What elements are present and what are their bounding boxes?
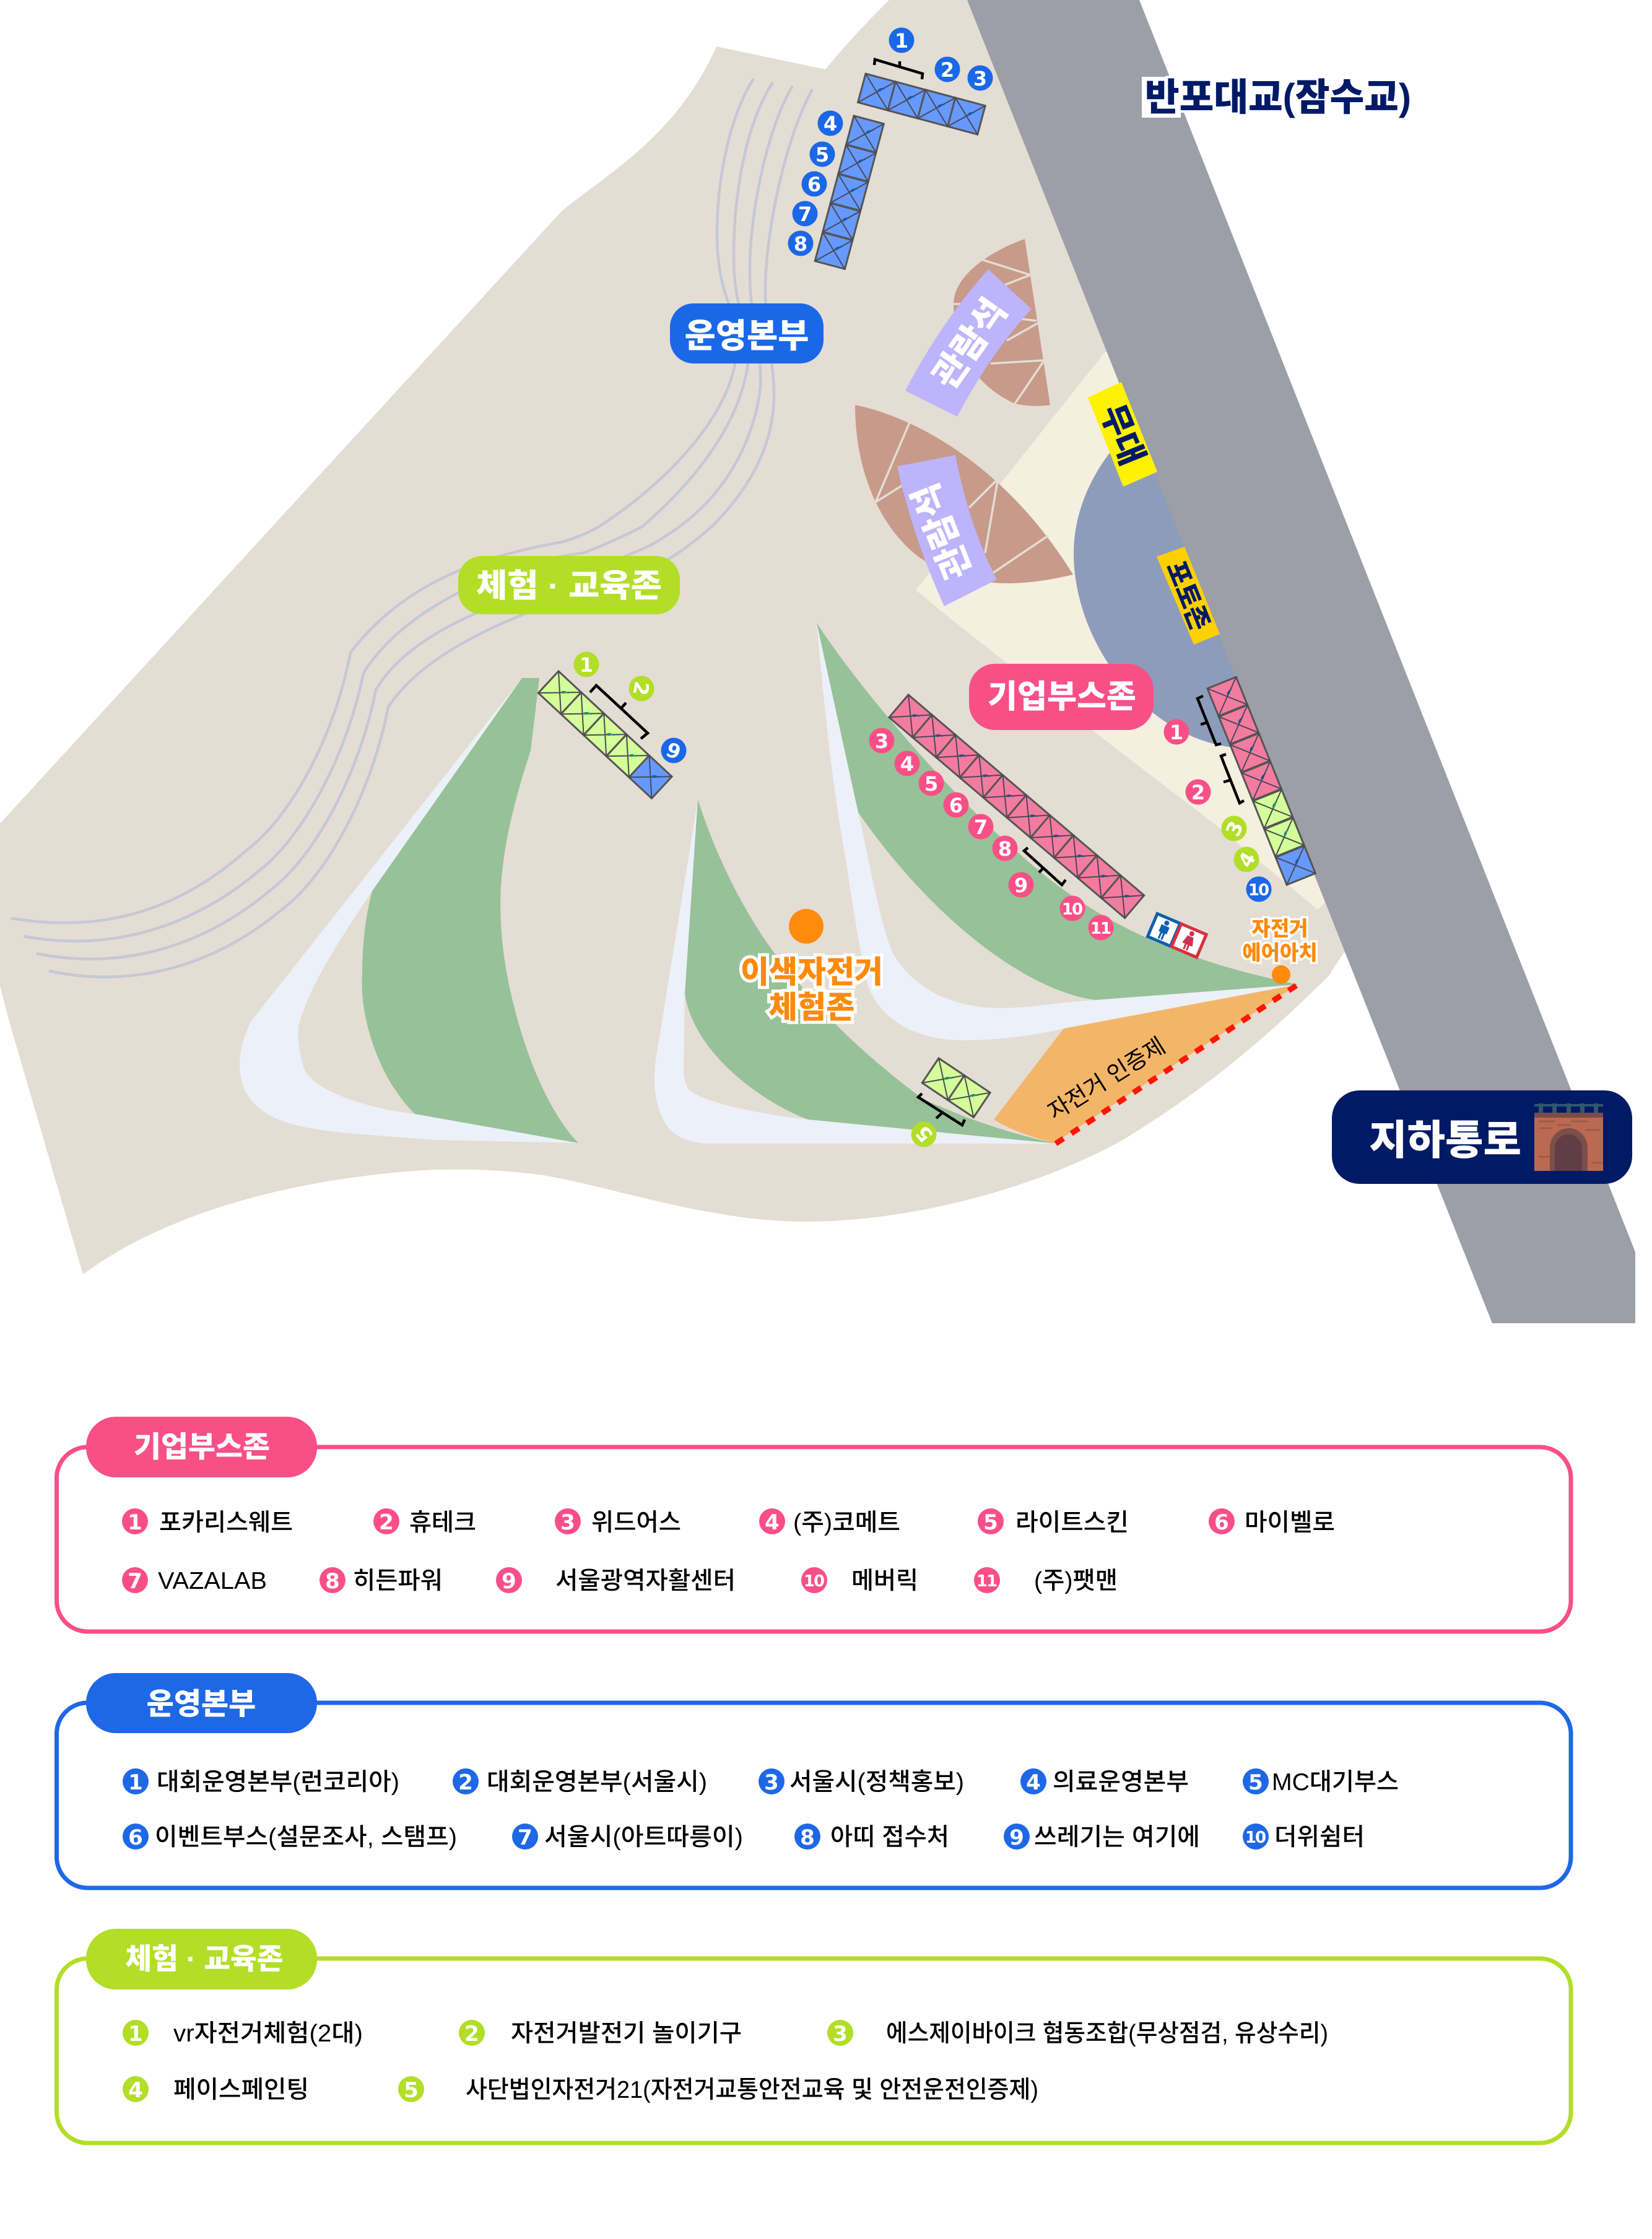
badges: education on map: 2 <box>628 680 654 697</box>
plaza <box>916 352 1362 910</box>
list: company booths: 7 <box>128 1569 142 1594</box>
list: company booths: 2 <box>379 1510 394 1535</box>
list: operations: 1 <box>128 1770 143 1795</box>
list: operations: MC대기부스 <box>1272 1769 1399 1796</box>
label: stage <box>1088 382 1157 487</box>
list: operations: 서울시(정책홍보) <box>789 1769 964 1796</box>
label: seating top: 관람석 <box>925 292 1015 396</box>
badges: company booths on map: 8 <box>998 837 1012 861</box>
list: operations <box>123 1768 1399 1851</box>
pill: company booths <box>969 664 1154 730</box>
badges: education on map: 5 <box>911 1121 937 1147</box>
bridge name: 반포대교(잠수교) <box>1145 76 1411 118</box>
path middle <box>654 799 1058 1144</box>
booths: green pair <box>922 1058 990 1118</box>
booths: pink row <box>889 695 1144 918</box>
badges: company booths on map: 10 <box>1062 900 1082 919</box>
badges: company booths on map <box>869 720 1211 940</box>
list: company booths: 라이트스킨 <box>1015 1510 1129 1536</box>
air arch marker <box>1242 917 1318 984</box>
air arch marker: 자전거 <box>1251 917 1308 940</box>
badges: operations on map: 1 <box>895 29 908 53</box>
badges: company booths on map: 2 <box>1191 781 1205 804</box>
list: education: 5 <box>404 2078 419 2103</box>
list: education: 2 <box>464 2022 479 2046</box>
list: education: 페이스페인팅 <box>173 2077 309 2103</box>
list: company booths: (주)팻맨 <box>1034 1568 1118 1594</box>
lawn middle <box>685 799 1058 1144</box>
list: company booths: 1 <box>128 1510 142 1535</box>
badges: company booths on map: 1 <box>1170 721 1183 744</box>
booths: top row <box>858 74 985 134</box>
list: company booths: 위드어스 <box>591 1510 681 1536</box>
badges: operations on map: 10 <box>1248 881 1269 900</box>
list: education: 자전거발전기 놀이기구 <box>511 2020 742 2047</box>
path left <box>240 678 578 1143</box>
list: operations: 7 <box>518 1825 533 1850</box>
list: company booths: 9 <box>502 1569 516 1594</box>
brackets <box>590 59 1244 1125</box>
map <box>0 0 1635 1323</box>
list: company booths: 5 <box>983 1510 998 1535</box>
icon: tunnel <box>1534 1103 1603 1171</box>
pill: education: 체험 · 교육존 <box>476 568 662 604</box>
label: photo zone: 포토존 <box>1161 557 1215 635</box>
badges: company booths on map: 9 <box>1014 874 1028 897</box>
bicycle certification area <box>994 985 1298 1143</box>
list: operations: 대회운영본부(런코리아) <box>157 1769 399 1796</box>
panel: education <box>57 1929 1571 2143</box>
badges: operations on map <box>661 27 1272 902</box>
badges: company booths on map: 11 <box>1090 920 1111 938</box>
list: operations: 9 <box>1009 1825 1024 1850</box>
contour lines <box>11 79 812 977</box>
list: operations: 4 <box>1026 1770 1041 1795</box>
badges: company booths on map: 7 <box>974 815 988 839</box>
list: operations: 2 <box>458 1770 473 1795</box>
seating top <box>953 239 1050 406</box>
pill: underpass <box>1332 1090 1632 1184</box>
list: education: 1 <box>128 2022 143 2046</box>
list: company booths: 마이벨로 <box>1245 1510 1335 1536</box>
list: company booths: 포카리스웨트 <box>159 1510 293 1536</box>
label: seating bottom <box>897 455 997 606</box>
road <box>967 0 1635 1323</box>
label: bicycle certification: 자전거 인증제 <box>1043 1033 1170 1125</box>
list: operations: 8 <box>800 1825 815 1850</box>
list: education: 에스제이바이크 협동조합(무상점검, 유상수리) <box>886 2020 1328 2047</box>
list: company booths <box>122 1508 1335 1594</box>
list: company booths: 11 <box>976 1572 997 1591</box>
booths: left column <box>815 116 884 269</box>
list: operations: 쓰레기는 여기에 <box>1034 1824 1200 1851</box>
list: education: 4 <box>128 2078 143 2103</box>
badges: operations on map: 5 <box>815 143 829 167</box>
path right <box>817 623 1298 1040</box>
list: company booths: VAZALAB <box>158 1568 267 1594</box>
pill: operations <box>670 303 824 363</box>
badges: education on map: 3 <box>1221 817 1248 840</box>
list: operations: 이벤트부스(설문조사, 스탬프) <box>155 1824 457 1851</box>
red dashed line <box>1056 985 1298 1144</box>
panel: operations <box>57 1673 1571 1888</box>
badges: education on map: 4 <box>1233 848 1261 872</box>
pill: education <box>458 556 680 614</box>
list: company booths: 휴테크 <box>409 1510 476 1536</box>
list: education: 3 <box>833 2022 848 2046</box>
list: operations: 아띠 접수처 <box>830 1824 949 1851</box>
badges: company booths on map: 4 <box>900 752 914 776</box>
badges: operations on map: 8 <box>794 232 807 256</box>
label: seating bottom: 관람석 <box>905 477 979 585</box>
heading: education <box>86 1929 317 1989</box>
pill: company booths: 기업부스존 <box>988 679 1136 715</box>
list: operations: 6 <box>128 1825 143 1850</box>
land area <box>0 0 1362 1274</box>
list: company booths: (주)코메트 <box>793 1510 900 1536</box>
heading: education: 체험 · 교육존 <box>125 1942 284 1975</box>
list: operations: 서울시(아트따릉이) <box>544 1824 743 1851</box>
list: operations: 5 <box>1248 1770 1263 1795</box>
restroom icons <box>1147 914 1206 957</box>
badges: company booths on map: 6 <box>949 794 963 817</box>
label: photo zone <box>1157 547 1220 645</box>
list: company booths: 6 <box>1214 1510 1229 1535</box>
badges: education on map <box>573 651 1261 1147</box>
heading: operations <box>86 1673 317 1733</box>
badges: education on map: 1 <box>580 653 593 677</box>
list: company booths: 3 <box>560 1510 575 1535</box>
list: company booths: 4 <box>765 1510 780 1535</box>
bicycle experience zone marker <box>741 909 883 1025</box>
badges: operations on map: 6 <box>807 173 821 196</box>
label: stage: 무대 <box>1093 399 1151 471</box>
list: company booths: 8 <box>325 1569 340 1594</box>
list: operations: 대회운영본부(서울시) <box>487 1769 707 1796</box>
seating bottom <box>855 405 1073 583</box>
pill: underpass: 지하통로 <box>1369 1117 1521 1163</box>
list: education: vr자전거체험(2대) <box>173 2020 363 2047</box>
heading: operations: 운영본부 <box>147 1688 256 1721</box>
booths: right column <box>1207 677 1315 885</box>
bicycle experience zone marker: 체험존 <box>769 990 854 1025</box>
heading: company booth zone <box>86 1417 317 1477</box>
badges: operations on map: 4 <box>824 112 837 136</box>
heading: company booth zone: 기업부스존 <box>134 1430 270 1463</box>
badges: operations on map: 9 <box>663 737 684 765</box>
stage semicircle <box>1074 427 1300 747</box>
list: operations: 의료운영본부 <box>1053 1769 1189 1796</box>
panel: company booth zone <box>57 1417 1571 1632</box>
list: operations: 10 <box>1245 1828 1266 1847</box>
lawn left <box>362 678 578 1143</box>
pill: operations: 운영본부 <box>685 318 809 355</box>
booths: education row <box>538 671 672 798</box>
air arch marker: 에어아치 <box>1242 941 1318 964</box>
badges: operations on map: 3 <box>973 67 987 90</box>
list: education: 사단법인자전거21(자전거교통안전교육 및 안전운전인증제) <box>466 2077 1038 2103</box>
list: education <box>123 2020 1328 2103</box>
list: operations: 3 <box>764 1770 779 1795</box>
list: operations: 더위쉼터 <box>1274 1824 1365 1851</box>
badges: company booths on map: 3 <box>875 729 889 753</box>
lawn right <box>817 623 1298 1000</box>
badges: company booths on map: 5 <box>924 772 938 796</box>
list: company booths: 메버릭 <box>851 1568 918 1594</box>
list: company booths: 히든파워 <box>353 1568 443 1594</box>
label: seating top <box>905 269 1032 417</box>
badges: operations on map: 2 <box>941 58 954 82</box>
list: company booths: 10 <box>804 1572 824 1591</box>
bicycle experience zone marker: 이색자전거 <box>741 955 883 989</box>
list: company booths: 서울광역자활센터 <box>555 1568 736 1594</box>
badges: operations on map: 7 <box>798 202 812 226</box>
